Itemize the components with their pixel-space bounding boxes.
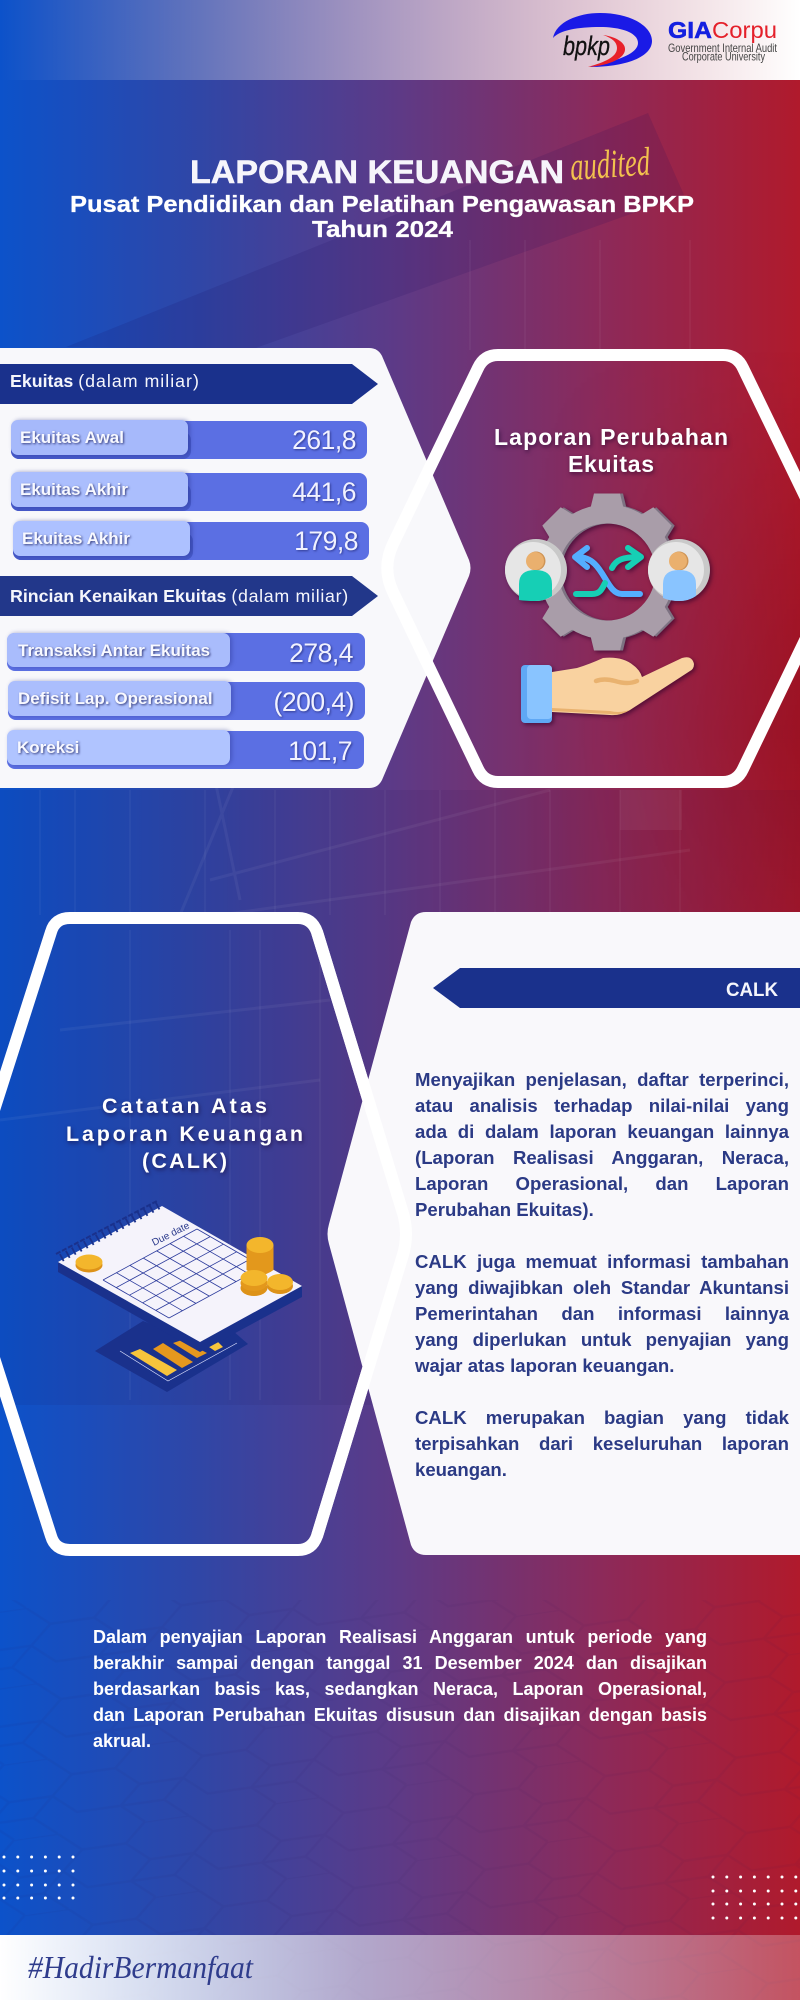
heading arrow: CALK — [433, 968, 800, 1008]
logo: GIA Corpu: Corporate University — [682, 50, 765, 64]
title: Pusat Pendidikan dan Pelatihan Pengawasan BPKP — [70, 191, 694, 217]
panel: ekuitas — [0, 348, 470, 788]
heading arrow: ekuitas: Ekuitas (dalam miliar) — [10, 371, 200, 391]
heading: catatan atas laporan keuangan: (CALK) — [142, 1149, 227, 1173]
heading arrow: rincian — [0, 576, 378, 616]
text block: CALK description: ada di dalam laporan keuangan lainnya — [415, 1121, 789, 1142]
icon: calendar with coins and chart — [56, 1201, 302, 1392]
icon: coin stack — [240, 1237, 293, 1296]
panel: CALK description — [317, 912, 800, 1555]
bar: ekuitas awal — [11, 420, 367, 459]
heading arrow: rincian: Rincian Kenaikan Ekuitas (dalam miliar) — [10, 586, 349, 606]
bar: ekuitas akhir 2 — [13, 521, 369, 560]
bar: ekuitas akhir — [11, 472, 367, 511]
icon: hand — [521, 657, 694, 723]
icon: mini bar chart — [95, 1321, 248, 1392]
heading: laporan perubahan ekuitas: Ekuitas — [568, 451, 654, 477]
bar: transaksi antar ekuitas: 278,4 — [289, 638, 353, 668]
bar: ekuitas akhir: 441,6 — [292, 477, 356, 507]
text block: CALK description: Menyajikan penjelasan, daftar terperinci, — [415, 1069, 789, 1090]
text block: CALK description: Perubahan Ekuitas). — [415, 1199, 594, 1220]
text block: CALK description: Laporan Operasional, dan Laporan — [415, 1173, 789, 1194]
top header band — [0, 0, 800, 80]
text block: CALK description: yang diperlukan untuk penyajian yang — [415, 1329, 789, 1350]
icon: gear with exchange and hand — [505, 494, 710, 723]
icon: calendar sheet: Due date — [150, 1220, 192, 1249]
background building photo — [0, 113, 800, 1405]
bar: ekuitas awal: Ekuitas Awal — [20, 428, 124, 447]
hexagon frame: laporan perubahan ekuitas — [387, 355, 800, 782]
logo: GIA Corpu — [668, 17, 778, 64]
text block: CALK description: yang diwajibkan oleh Standar Akuntansi — [415, 1277, 789, 1298]
title: Tahun 2024 — [312, 216, 453, 242]
icon: right person — [648, 539, 710, 601]
text block: CALK description: CALK merupakan bagian yang tidak — [415, 1407, 789, 1428]
logo: GIA Corpu: GIA — [668, 17, 712, 43]
bar: koreksi: Koreksi — [17, 738, 79, 757]
logo: GIA Corpu: Corpu — [712, 17, 777, 43]
heading: catatan atas laporan keuangan: Laporan Keuangan — [66, 1122, 303, 1146]
logo: BPKP — [553, 13, 652, 67]
footer band — [0, 1935, 800, 2000]
text block: closing note: berakhir sampai dengan tanggal 31 Desember 2024 dan disajikan — [93, 1653, 707, 1673]
heading arrow: CALK: CALK — [726, 980, 778, 1001]
text block: closing note: akrual. — [93, 1731, 151, 1751]
bar: ekuitas akhir 2: Ekuitas Akhir — [22, 529, 130, 548]
icon: calendar sheet — [56, 1201, 302, 1352]
bar: defisit lap operasional: (200,4) — [274, 687, 354, 717]
bar: transaksi antar ekuitas — [7, 633, 365, 671]
bar: ekuitas akhir 2: 179,8 — [294, 526, 358, 556]
heading: catatan atas laporan keuangan: Catatan Atas — [102, 1094, 267, 1118]
heading arrow: ekuitas — [0, 364, 378, 404]
text block: CALK description: CALK juga memuat informasi tambahan — [415, 1251, 789, 1272]
text block: closing note — [93, 1627, 707, 1751]
title: audited — [568, 138, 652, 189]
icon: left person — [505, 539, 567, 601]
text block: CALK description — [415, 1069, 790, 1480]
text block: closing note: Dalam penyajian Laporan Realisasi Anggaran untuk periode yang — [93, 1627, 707, 1647]
bar: ekuitas akhir: Ekuitas Akhir — [20, 480, 128, 499]
heading: laporan perubahan ekuitas — [494, 424, 728, 477]
bar: defisit lap operasional: Defisit Lap. Operasional — [18, 689, 213, 708]
text block: closing note: berdasarkan basis kas, sedangkan Neraca, Laporan Operasional, — [93, 1679, 707, 1699]
logo: BPKP: bpkp — [563, 31, 610, 61]
text block: CALK description: atau analisis terhadap nilai-nilai yang — [415, 1095, 789, 1116]
dots right — [713, 1877, 800, 1918]
bar: defisit lap operasional — [8, 681, 365, 720]
hashtag: #HadirBermanfaat — [28, 1949, 254, 1985]
title — [70, 138, 694, 242]
text block: CALK description: (Laporan Realisasi Anggaran, Neraca, — [415, 1147, 789, 1168]
heading: catatan atas laporan keuangan — [66, 1094, 303, 1173]
text block: CALK description: keuangan. — [415, 1459, 507, 1480]
text block: CALK description: Pemerintahan dan informasi lainnya — [415, 1303, 789, 1324]
bar: ekuitas awal: 261,8 — [292, 425, 356, 455]
bar: transaksi antar ekuitas: Transaksi Antar Ekuitas — [18, 641, 210, 660]
bar: koreksi — [7, 730, 364, 769]
dots left — [4, 1857, 75, 1898]
heading: laporan perubahan ekuitas: Laporan Perubahan — [494, 424, 728, 450]
title: LAPORAN KEUANGAN — [190, 154, 564, 190]
icon: coin left — [76, 1254, 102, 1272]
icon: exchange arrows — [575, 548, 641, 594]
icon: gear — [539, 494, 678, 650]
hexagon frame: CALK — [0, 918, 406, 1550]
text block: CALK description: wajar atas laporan keuangan. — [415, 1355, 674, 1376]
bar: koreksi: 101,7 — [288, 736, 352, 766]
text block: CALK description: terpisahkan dari keseluruhan laporan — [415, 1433, 789, 1454]
text block: closing note: dan Laporan Perubahan Ekuitas disusun dan disajikan dengan basis — [93, 1705, 707, 1725]
